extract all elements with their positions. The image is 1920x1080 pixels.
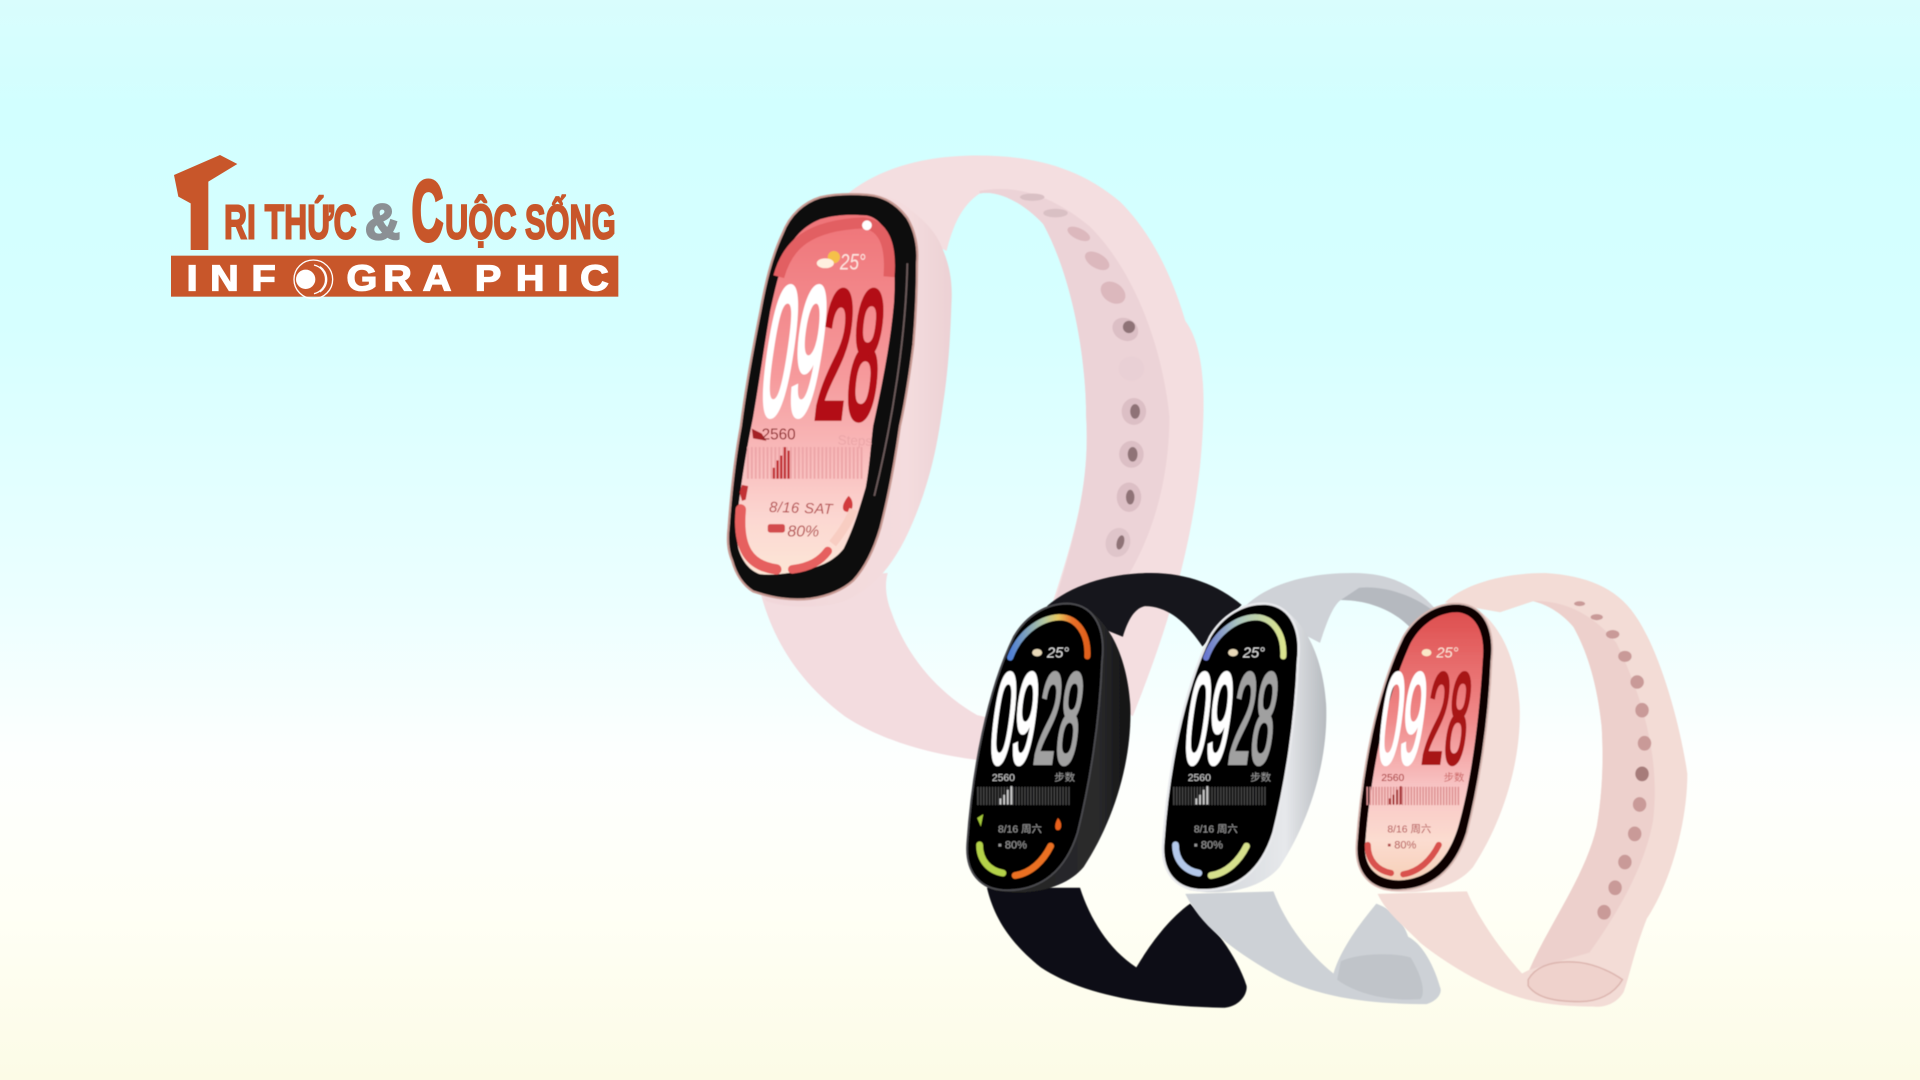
calorie icon	[843, 496, 853, 512]
watch screen	[737, 215, 895, 575]
silver strap lower	[1185, 891, 1441, 1004]
silver strap clasp	[1337, 954, 1423, 1000]
steps bar chart	[1367, 786, 1460, 804]
banner text: INFOGRAPHIC: INFGRAPHIC	[187, 259, 609, 299]
silver watch: 09	[1178, 647, 1241, 791]
small pink watch: 09	[1371, 647, 1434, 791]
silver strap inner band	[1341, 587, 1435, 642]
temperature: 25°	[1046, 646, 1069, 662]
strap full loop	[1378, 573, 1687, 1007]
activity icon	[977, 814, 983, 827]
black watch	[967, 573, 1247, 1008]
steps count: 2560	[762, 427, 796, 444]
logo text: SỐNG: SỐNG	[525, 194, 616, 249]
black watch: 28	[1029, 647, 1090, 791]
date: 8/16 周六	[998, 824, 1042, 836]
watch body	[1356, 602, 1520, 892]
watch screen	[1365, 612, 1483, 880]
strap holes	[1574, 601, 1651, 920]
ring indicator dot	[862, 220, 872, 230]
bottom left arc	[1368, 845, 1391, 873]
watch bezel	[1356, 604, 1492, 890]
logo text: UỘC: UỘC	[445, 194, 517, 249]
banner icon: concentric circle	[294, 260, 333, 299]
watch body	[1163, 602, 1326, 892]
temperature: 25°	[1435, 646, 1459, 662]
steps label: 步数	[1250, 771, 1272, 784]
steps count: 2560	[1188, 773, 1211, 784]
strap clasp	[1528, 962, 1622, 1002]
black strap lower	[987, 888, 1247, 1008]
date: 8/16 周六	[1194, 824, 1238, 836]
temperature: 25°	[1242, 646, 1265, 662]
small pink watch: 28	[1417, 647, 1478, 791]
watch body	[967, 602, 1130, 892]
pink strap inner band	[980, 189, 1169, 600]
bezel reflection	[874, 263, 907, 496]
steps label: Steps	[837, 432, 873, 449]
steps count: 2560	[1381, 773, 1405, 784]
weather icon	[1422, 649, 1431, 656]
steps label: 步数	[1444, 771, 1465, 784]
bottom left arc: light blue	[1176, 845, 1199, 873]
black strap upper	[1047, 573, 1242, 647]
watch bezel	[1163, 604, 1299, 890]
battery: ▪ 80%	[1194, 840, 1223, 852]
watch body	[730, 193, 952, 607]
silver watch	[1163, 573, 1441, 1004]
logo icon: roof-shaped T	[174, 155, 237, 250]
bottom right arc: orange	[1015, 846, 1051, 876]
date: 8/16 SAT	[769, 500, 834, 518]
weather icon	[1228, 649, 1238, 656]
bottom right arc	[1403, 845, 1439, 874]
steps bar chart	[977, 786, 1070, 804]
logo banner	[171, 256, 618, 297]
battery icon	[768, 524, 785, 533]
weather icon	[1032, 649, 1042, 656]
watch bezel	[728, 194, 917, 600]
bottom left arc: green	[980, 845, 1003, 873]
large pink watch	[728, 156, 1204, 762]
bottom right arc	[792, 551, 828, 569]
battery: ▪ 80%	[1387, 840, 1417, 852]
calorie icon	[1055, 818, 1061, 830]
top rainbow arc	[1010, 617, 1087, 658]
bottom right arc track	[833, 509, 853, 544]
steps count: 2560	[992, 773, 1015, 784]
top progress ring	[779, 223, 889, 277]
large pink watch: 28	[809, 253, 893, 456]
activity icon	[740, 485, 748, 501]
watch bezel	[967, 604, 1103, 890]
logo ampersand: &	[365, 194, 400, 250]
logo: Tri Thức & Cuộc Sống Infographic	[171, 155, 618, 299]
silver strap upper	[1247, 573, 1435, 643]
steps bar chart	[747, 447, 864, 479]
steps icon	[752, 429, 767, 441]
black watch: 09	[983, 647, 1046, 791]
silver watch: 28	[1223, 647, 1285, 791]
top rainbow arc	[1206, 617, 1283, 658]
logo text: RI THỨC: RI THỨC	[224, 194, 357, 249]
temperature: 25°	[839, 249, 866, 274]
battery: ▪ 80%	[998, 840, 1027, 852]
pink strap upper outer	[845, 156, 1204, 716]
steps bar chart	[1173, 786, 1266, 804]
strap adjustment holes	[1020, 193, 1146, 560]
small pink watch	[1356, 573, 1687, 1007]
strap inner band	[1529, 601, 1655, 970]
pink strap lower	[759, 573, 1010, 762]
steps label: 步数	[1054, 771, 1076, 784]
logo text: large C: C	[412, 164, 443, 259]
watch screen: 09	[751, 250, 839, 453]
weather icon	[817, 251, 840, 268]
battery percent: 80%	[787, 523, 819, 540]
bottom right arc: yellow green	[1211, 846, 1247, 876]
bottom left arc	[740, 509, 776, 569]
date: 8/16 周六	[1387, 824, 1431, 836]
